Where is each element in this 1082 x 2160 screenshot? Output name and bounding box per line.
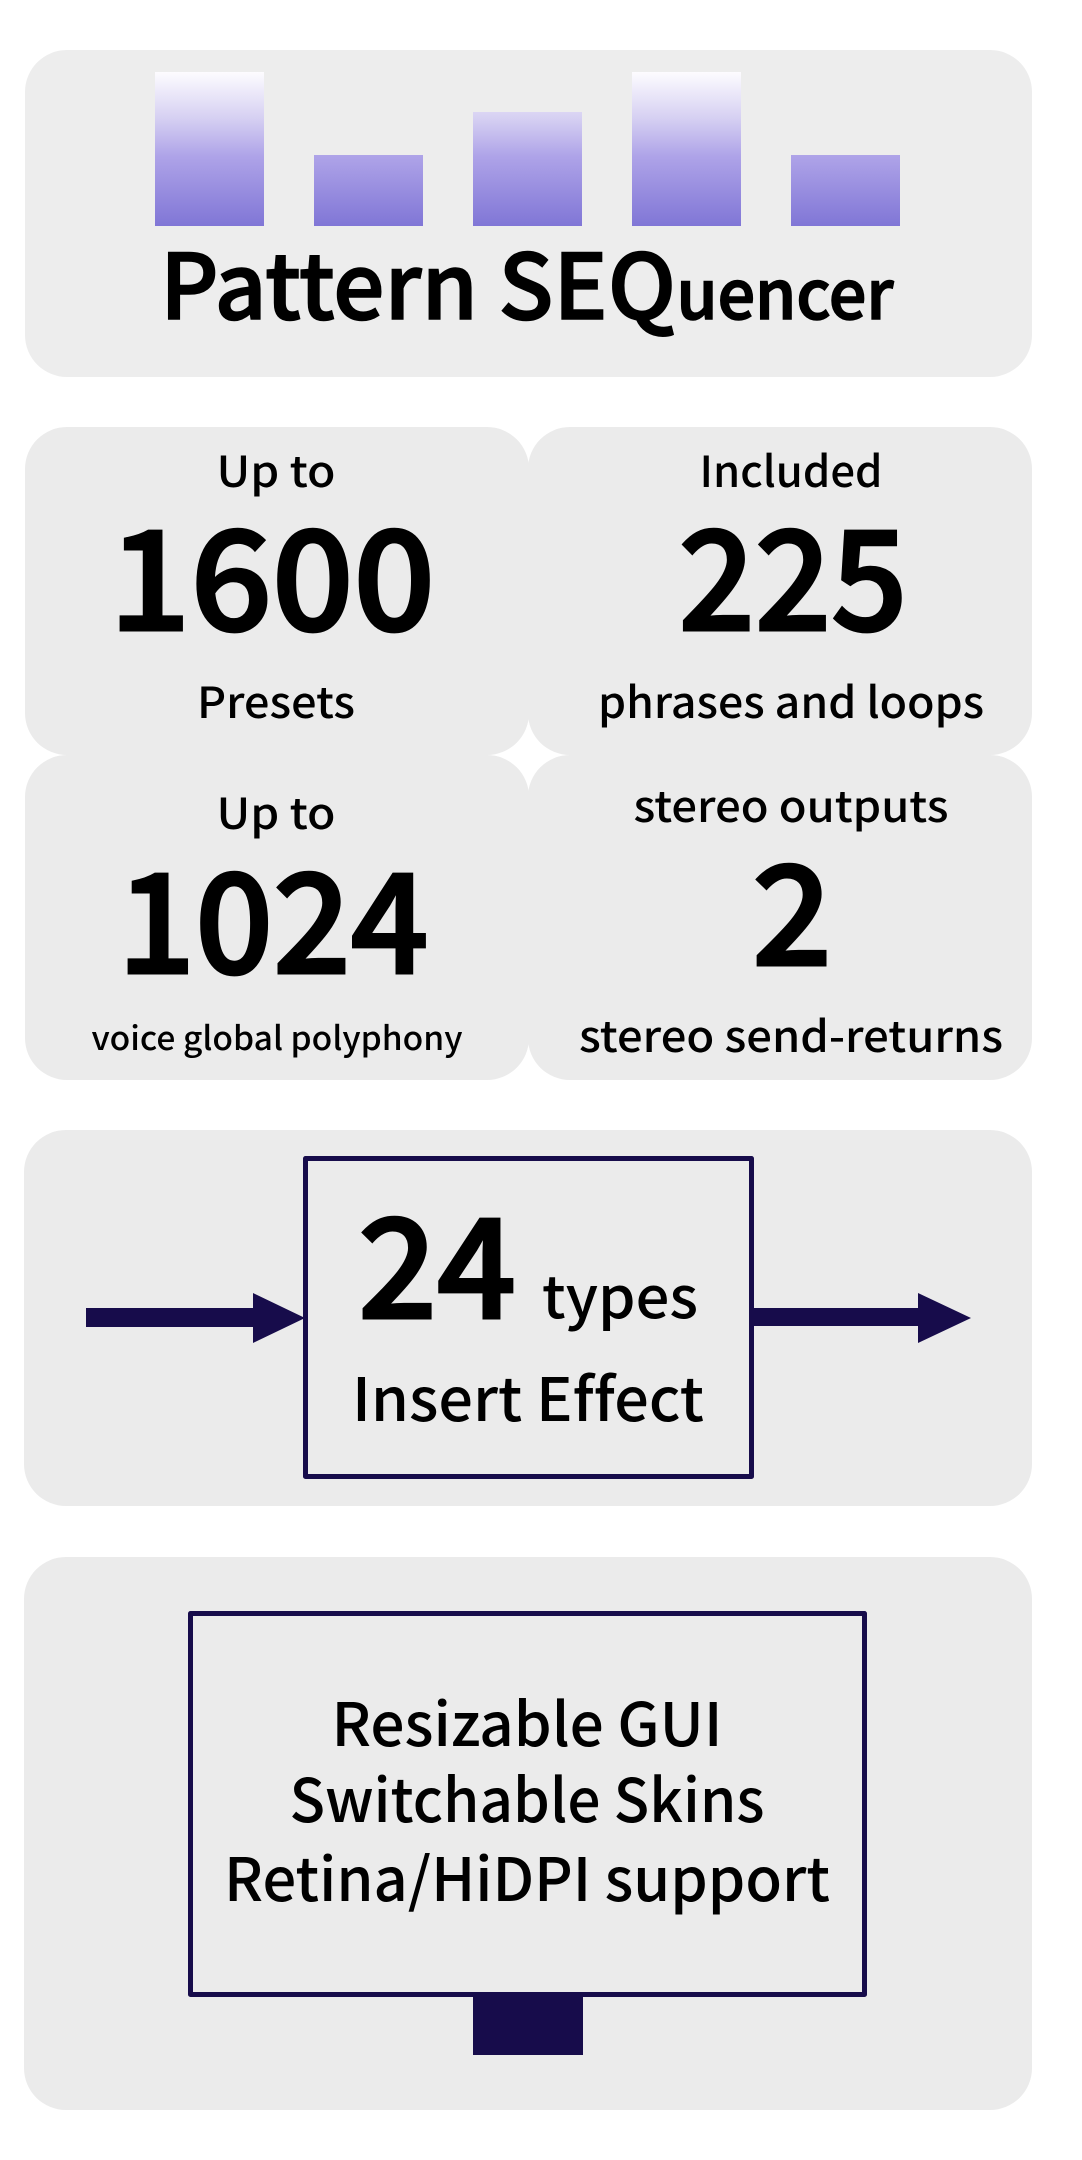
panel: presets — [25, 427, 529, 755]
panel: phrases and loops — [528, 427, 1032, 755]
panel: polyphony: Up to — [216, 780, 336, 842]
panel: stereo outputs — [528, 755, 1032, 1080]
panel: stereo outputs: stereo send-returns — [579, 1003, 1003, 1065]
title: uencer — [676, 240, 894, 339]
panel: presets: Presets — [197, 669, 355, 731]
panel: presets: 1600 — [109, 470, 435, 670]
panel: GUI: Resizable GUI — [332, 1677, 722, 1764]
panel: GUI — [24, 1557, 1032, 2110]
panel: phrases and loops: 225 — [678, 470, 908, 670]
panel: insert effect: 24 — [358, 1158, 516, 1358]
panel: polyphony — [25, 755, 529, 1080]
panel: GUI: Switchable Skins — [290, 1753, 764, 1840]
panel: insert effect: Insert Effect — [352, 1352, 704, 1439]
bar chart: step pattern — [155, 72, 900, 226]
icon: monitor stand — [473, 1992, 583, 2055]
panel: insert effect — [24, 1130, 1032, 1506]
panel: insert effect: types — [542, 1251, 698, 1335]
panel: GUI: Retina/HiDPI support — [224, 1832, 830, 1919]
panel: pattern sequencer — [25, 50, 1032, 377]
arrow: output — [750, 1293, 971, 1343]
panel: stereo outputs: stereo outputs — [634, 773, 948, 835]
panel: polyphony: voice global polyphony — [92, 1012, 463, 1060]
panel: stereo outputs: 2 — [752, 805, 832, 1005]
icon: monitor screen — [190, 1614, 864, 1994]
panel: phrases and loops: phrases and loops — [598, 669, 984, 731]
panel: phrases and loops: Included — [700, 438, 882, 500]
title: Pattern SEQ — [160, 215, 676, 345]
box: effect — [306, 1158, 752, 1476]
title — [160, 215, 894, 345]
panel: presets: Up to — [216, 438, 336, 500]
panel: polyphony: 1024 — [118, 813, 428, 1013]
arrow: input — [86, 1293, 305, 1343]
